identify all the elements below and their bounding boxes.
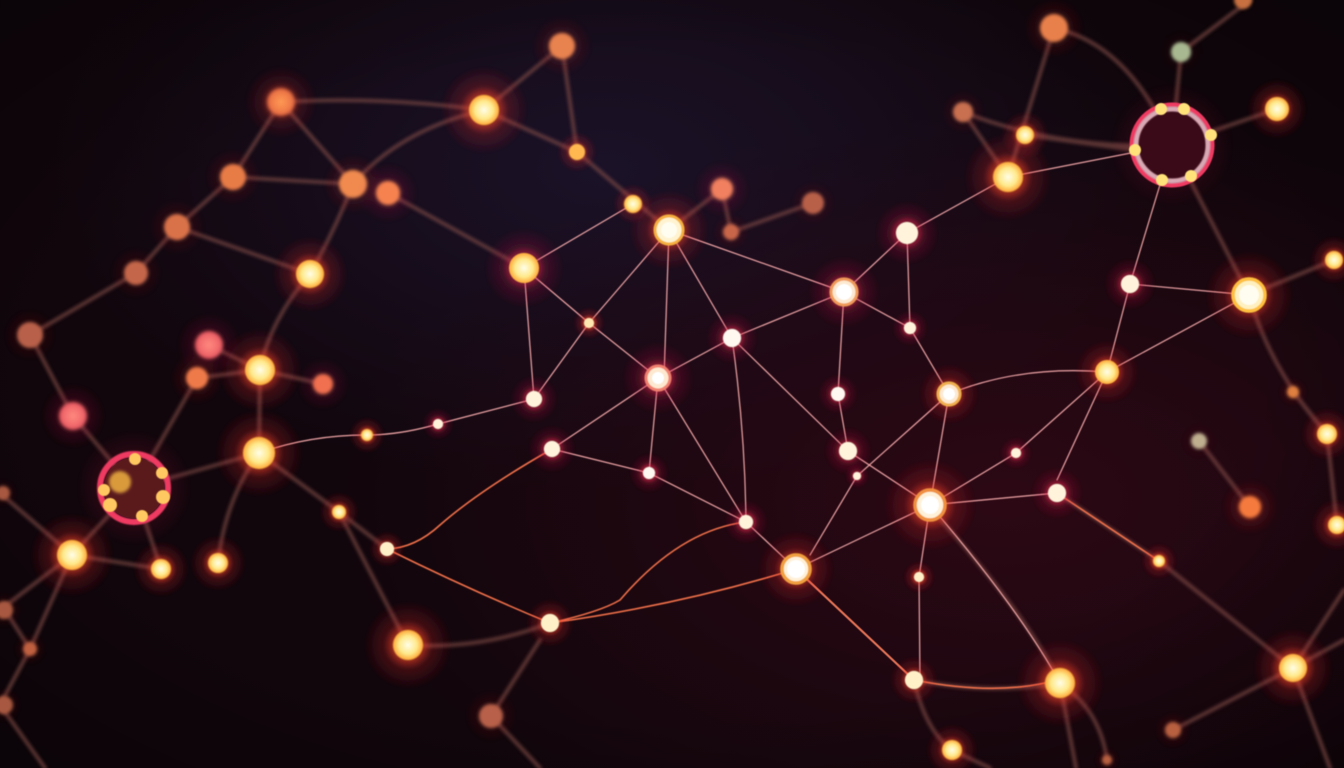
inner thin connections xyxy=(259,145,1249,683)
large ring node: left xyxy=(76,430,192,546)
small white-pink nodes xyxy=(369,201,1156,704)
ringed hub nodes xyxy=(622,190,1293,607)
large ring node: upper right xyxy=(1110,83,1234,207)
warm thin connections xyxy=(387,449,1159,688)
